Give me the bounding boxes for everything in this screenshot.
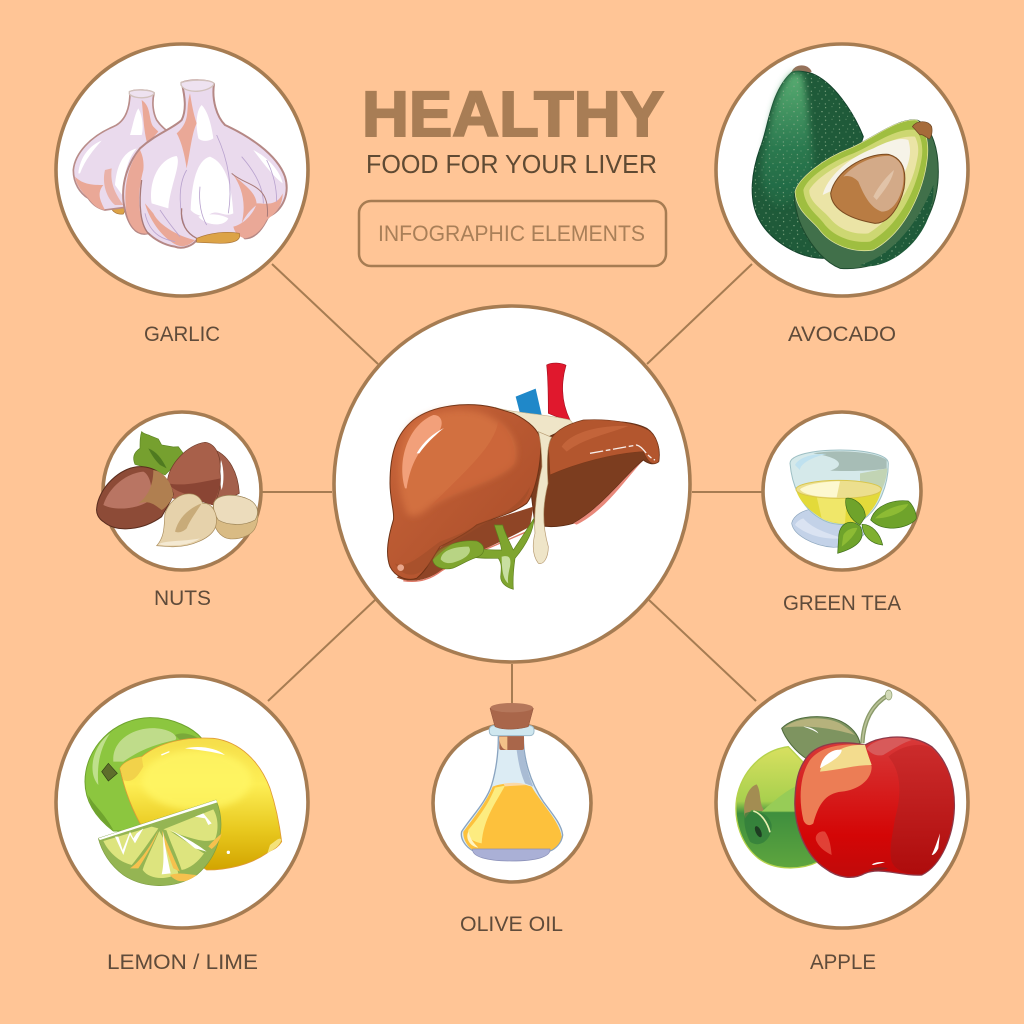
panel: lemon and lime (56, 676, 308, 974)
title: healthy: HEALTHY (362, 78, 664, 150)
panel: olive oil (433, 703, 591, 936)
icon: apple (736, 690, 954, 877)
label: lemon / lime: LEMON / LIME (107, 951, 258, 974)
connector lines (262, 264, 762, 726)
panel: green tea (763, 412, 921, 615)
icon: liver (388, 363, 659, 589)
panel: nuts (97, 412, 261, 610)
icon: olive oil bottle (461, 703, 563, 861)
badge: infographic elements (359, 201, 666, 266)
title block (359, 78, 666, 266)
label: apple: APPLE (810, 951, 876, 974)
icon: garlic (73, 80, 287, 248)
subtitle: FOOD FOR YOUR LIVER (366, 151, 657, 179)
panel: garlic (56, 44, 308, 346)
label: garlic: GARLIC (144, 323, 220, 346)
panel: apple (716, 676, 968, 974)
label: nuts: NUTS (154, 587, 211, 610)
label: avocado: AVOCADO (788, 323, 896, 346)
panel: liver (334, 306, 690, 662)
icon: nuts (97, 432, 258, 547)
icon: lemon and lime (85, 718, 282, 886)
icon: avocado (752, 65, 938, 269)
icon: green tea cup (790, 450, 916, 553)
label: green tea: GREEN TEA (783, 592, 901, 615)
badge: infographic elements: INFOGRAPHIC ELEMENTS (378, 221, 645, 246)
panel: avocado (716, 44, 968, 346)
label: olive oil: OLIVE OIL (460, 913, 563, 936)
